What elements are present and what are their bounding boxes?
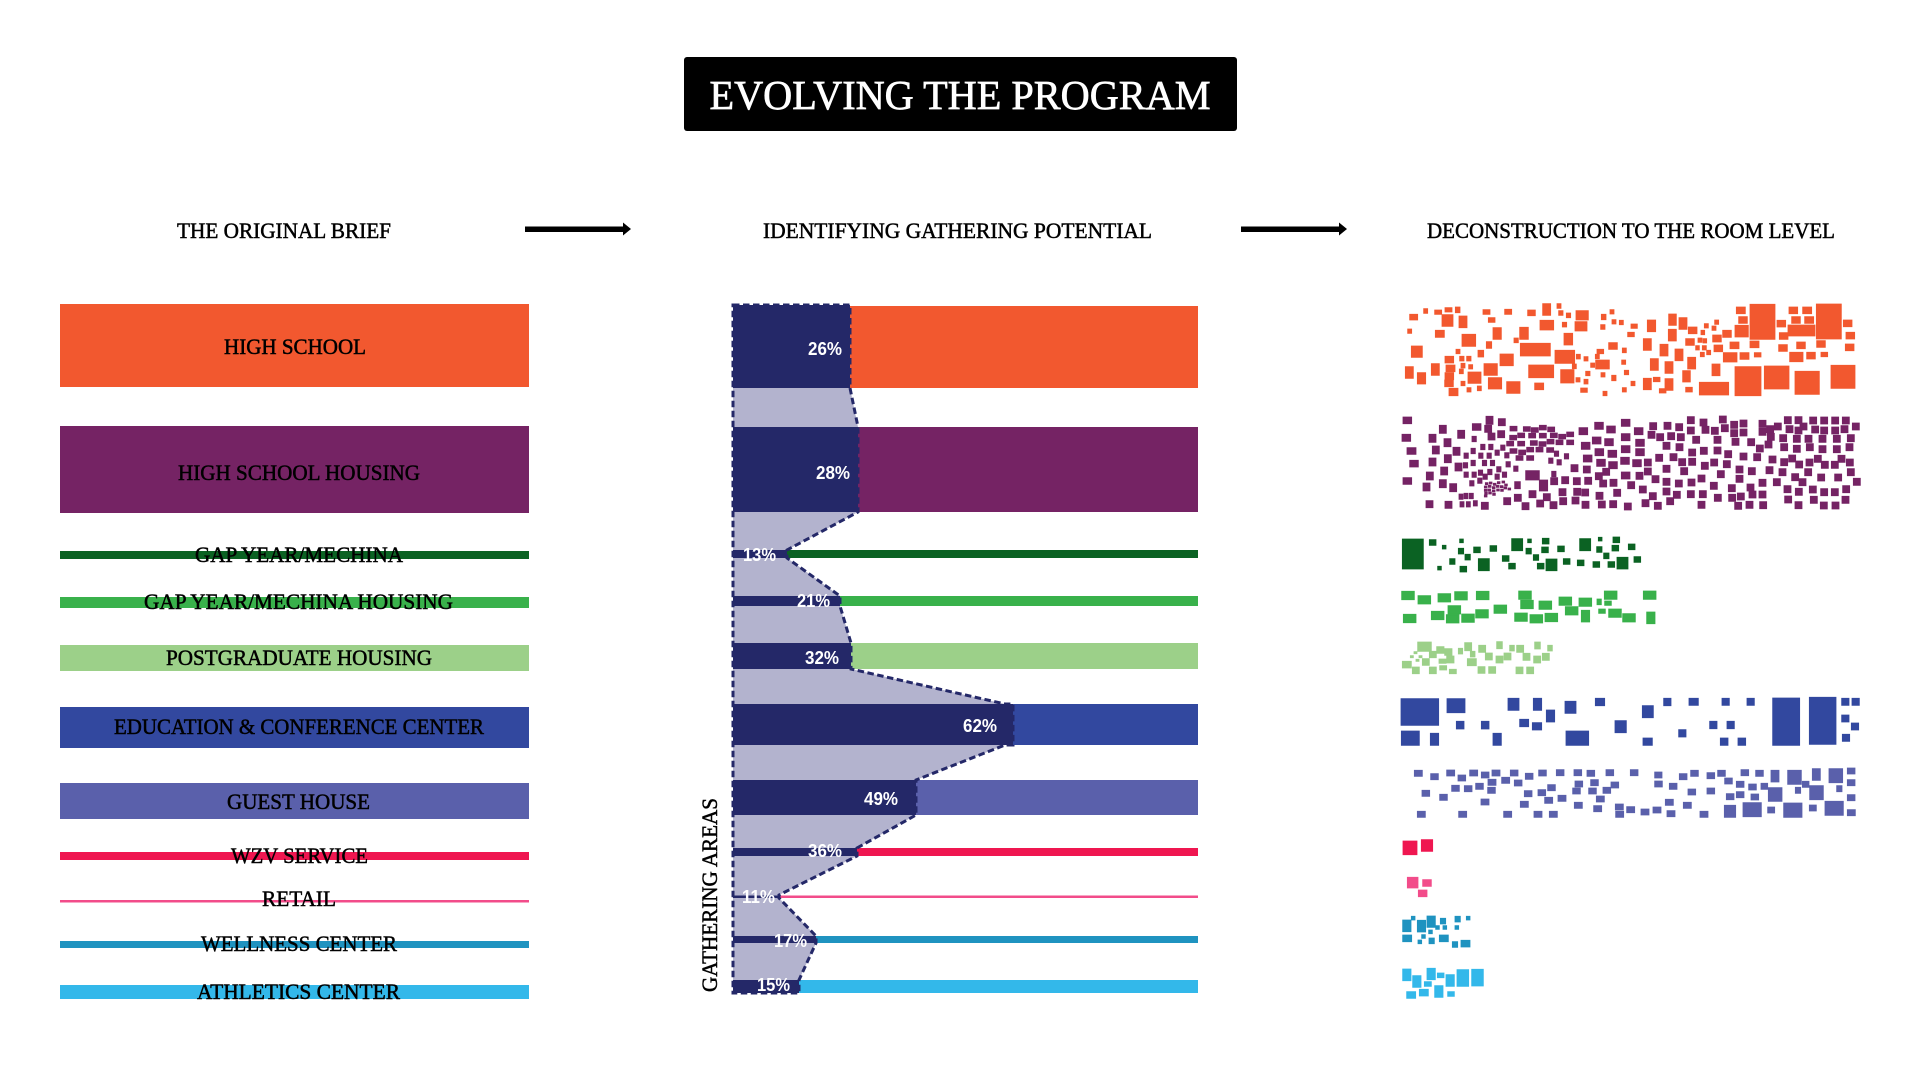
bar: retail: RETAIL — [262, 886, 336, 911]
percentage labels: 11% — [742, 887, 775, 907]
bar: high school housing — [60, 426, 529, 513]
bar: education and conference center: EDUCATION & CONFERENCE CENTER — [114, 714, 484, 739]
bar: high school housing: HIGH SCHOOL HOUSING — [178, 460, 420, 485]
gathering area fill — [733, 305, 1013, 993]
title: EVOLVING THE PROGRAM — [710, 72, 1210, 118]
bar: wellness center: WELLNESS CENTER — [201, 931, 397, 956]
rooms: wellness center — [1403, 916, 1470, 947]
heading: identifying gathering potential: IDENTIFYING GATHERING POTENTIAL — [763, 218, 1152, 243]
percentage labels: 36% — [808, 841, 842, 861]
bar: gap year/mechina housing: GAP YEAR/MECHINA HOUSING — [144, 589, 453, 614]
percentage labels: 62% — [963, 716, 997, 736]
title — [684, 57, 1237, 131]
bar: education and conference center — [60, 707, 529, 748]
bar: gap year/mechina: GAP YEAR/MECHINA — [195, 542, 403, 567]
bar: postgraduate housing — [60, 645, 529, 671]
panel: gathering potential chart — [697, 305, 1198, 995]
bar: athletics center — [60, 979, 529, 1004]
arrow: brief to gathering — [525, 222, 631, 236]
bar: high school: HIGH SCHOOL — [224, 334, 366, 359]
rooms: retail — [1407, 877, 1431, 897]
bar: wellness center — [60, 931, 529, 956]
rooms: gap year/mechina — [1402, 537, 1641, 572]
bar: guest house — [60, 783, 529, 819]
percentage labels: 17% — [774, 931, 807, 951]
program bars — [779, 306, 1198, 993]
arrow: gathering to rooms — [1241, 222, 1347, 236]
percentage labels: 15% — [757, 975, 790, 995]
heading: deconstruction to the room level: DECONSTRUCTION TO THE ROOM LEVEL — [1427, 218, 1835, 243]
bar: postgraduate housing: POSTGRADUATE HOUSING — [166, 645, 432, 670]
percentage labels: 26% — [808, 339, 842, 359]
panel: deconstruction to room level — [1401, 304, 1860, 998]
gathering share bars — [733, 305, 1013, 993]
rooms: education and conference center — [1401, 697, 1859, 745]
percentage labels — [742, 339, 997, 995]
bar: wzv service — [60, 843, 529, 868]
panel: the original brief bars — [60, 304, 529, 1004]
bar: gap year/mechina housing — [60, 589, 529, 614]
axis label: gathering areas: GATHERING AREAS — [697, 798, 722, 992]
rooms: postgraduate housing — [1402, 642, 1552, 674]
percentage labels: 32% — [805, 648, 839, 668]
percentage labels: 28% — [816, 463, 850, 483]
rooms: wzv service — [1403, 840, 1433, 855]
bar: gap year/mechina — [60, 542, 529, 567]
percentage labels: 21% — [797, 591, 830, 611]
percentage labels: 49% — [864, 789, 898, 809]
bar: guest house: GUEST HOUSE — [227, 789, 370, 814]
rooms: high school — [1405, 304, 1855, 396]
rooms: gap year/mechina housing — [1402, 591, 1656, 624]
dashed gathering outline — [733, 305, 1013, 993]
heading: the original brief: THE ORIGINAL BRIEF — [177, 218, 391, 243]
percentage labels: 13% — [743, 545, 776, 565]
rooms: athletics center — [1403, 968, 1483, 998]
rooms: guest house — [1414, 768, 1855, 817]
bar: high school — [60, 304, 529, 387]
rooms: high school housing — [1402, 416, 1860, 510]
bar: athletics center: ATHLETICS CENTER — [197, 979, 400, 1004]
bar: wzv service: WZV SERVICE — [231, 843, 368, 868]
